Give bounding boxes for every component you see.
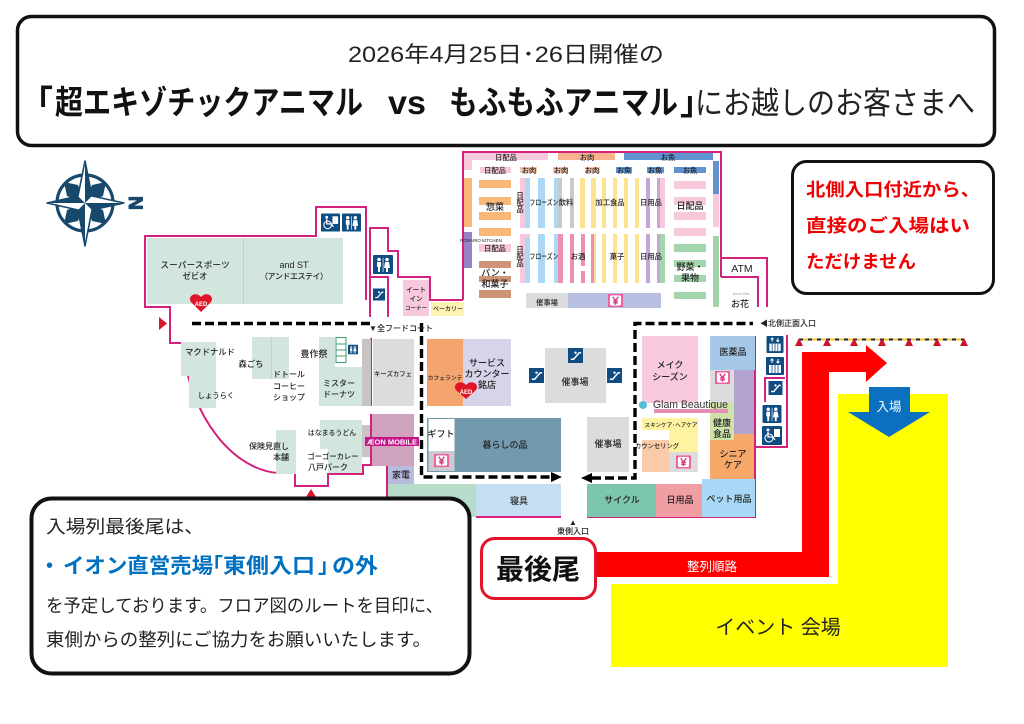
west wing tenants xyxy=(147,238,343,304)
east entrance label xyxy=(557,518,589,536)
eat-in corner xyxy=(403,280,429,316)
main title: 」 xyxy=(680,84,713,121)
central tenants: 催事場 xyxy=(561,376,589,387)
notice: north entrance: 北側入口付近から、 xyxy=(806,180,980,200)
west food court tenants: 家電 xyxy=(392,469,410,480)
callout: queue end: 東側からの整列にご協力をお願いいたします。 xyxy=(46,630,431,650)
north wing tenants: 食品 xyxy=(713,428,731,439)
north wing tenants xyxy=(587,336,755,517)
north wing tenants: サイクル xyxy=(604,495,640,505)
blue emphasis line xyxy=(39,555,378,578)
west food court tenants: キーズカフェ xyxy=(374,369,412,378)
west food court tenants: ミスター xyxy=(323,379,355,388)
Glam Beautique logo: Glam Beautique xyxy=(653,399,728,411)
supermarket: 日用品 xyxy=(640,252,662,261)
supermarket: 飲料 xyxy=(559,198,574,207)
west food court tenants: 豊作祭 xyxy=(300,348,328,359)
supermarket: 配 xyxy=(516,252,524,261)
central tenants: 銘店 xyxy=(478,379,496,390)
north wing tenants: スキンケア･ヘアケア xyxy=(644,422,698,429)
AED marker west xyxy=(190,294,212,312)
queue end label: 最後尾 xyxy=(496,554,580,585)
supermarket: お肉 xyxy=(585,166,599,175)
supermarket: ROSARIO KITCHEN xyxy=(460,238,502,243)
north wing tenants: シーズン xyxy=(652,371,688,382)
event venue yellow area xyxy=(611,394,948,667)
central tenants: カフェランテ xyxy=(428,375,463,382)
callout: queue end: を予定しております。フロア図のルートを目印に、 xyxy=(46,596,443,616)
red marker south xyxy=(306,489,316,497)
eat-in corner: コーナー xyxy=(405,305,427,312)
main title xyxy=(20,84,713,121)
supermarket: ATM xyxy=(731,263,753,275)
supermarket: 和菓子 xyxy=(481,278,509,289)
supermarket: お魚 xyxy=(648,166,663,175)
west wing tenants: ゼビオ xyxy=(183,271,207,281)
main title: 「 xyxy=(20,84,53,121)
east entrance label: 東側入口 xyxy=(557,526,589,536)
east entrance label: ▲ xyxy=(569,518,577,527)
blue emphasis line: 東側入口 xyxy=(223,555,315,578)
supermarket: お魚 xyxy=(661,153,676,162)
supermarket: 果物 xyxy=(681,272,699,283)
queue route red arrow: 整列順路 xyxy=(687,559,737,574)
west food court tenants: ショップ xyxy=(273,393,305,402)
eat-in corner: イート xyxy=(406,287,426,294)
supermarket: パン・ xyxy=(481,268,509,278)
blue emphasis line: イオン直営売場 xyxy=(63,555,213,578)
supermarket: 品 xyxy=(516,205,524,214)
title panel xyxy=(18,16,994,146)
supermarket: お魚 xyxy=(617,166,632,175)
central tenants xyxy=(427,339,629,472)
supermarket xyxy=(460,152,767,309)
supermarket: 日配品 xyxy=(676,201,704,211)
supermarket: フローズン xyxy=(530,198,558,207)
west wing tenants: and ST xyxy=(279,260,309,270)
floor map xyxy=(145,152,816,536)
callout: queue end: 入場列最後尾は、 xyxy=(46,517,204,537)
compass icon xyxy=(47,161,145,246)
north wing tenants: ケア xyxy=(724,460,742,470)
north wing tenants: メイク xyxy=(657,360,683,370)
west food court tenants: はなまるうどん xyxy=(308,428,356,437)
west food court tenants: しょうらく xyxy=(198,391,234,400)
supermarket: 催事場 xyxy=(536,298,559,307)
eat-in corner: イン xyxy=(409,296,423,303)
west wing tenants: スーパースポーツ xyxy=(160,260,230,270)
main title: vs xyxy=(388,84,426,121)
supermarket: 日配品 xyxy=(495,153,517,162)
supermarket: お花 xyxy=(731,298,749,309)
restroom icons west xyxy=(321,213,393,300)
north wing tenants: 日用品 xyxy=(666,495,694,505)
bakery: ベーカリー xyxy=(433,306,463,313)
supermarket: 野菜・ xyxy=(676,261,704,272)
central tenants: 催事場 xyxy=(594,438,622,449)
west food court tenants: ドーナツ xyxy=(323,390,355,399)
north entrance label: ◀北側正面入口 xyxy=(760,318,816,328)
notice: north entrance: ただけません xyxy=(806,252,916,272)
blue emphasis line: ・ xyxy=(39,555,60,578)
entrance marker west xyxy=(159,317,167,330)
entry blue arrow: 入場 xyxy=(876,400,902,414)
AEON Mobile sign: ÆON MOBILE xyxy=(367,438,417,446)
west food court tenants: 八戸パーク xyxy=(308,463,348,472)
supermarket: お魚 xyxy=(683,166,698,175)
supermarket: 日 xyxy=(516,245,524,254)
west food court tenants: マクドナルド xyxy=(185,347,235,357)
west food court tenants: 森ごち xyxy=(239,359,263,369)
supermarket: 日配品 xyxy=(484,244,506,253)
north service icons and walls xyxy=(755,335,787,447)
central tenants: サービス xyxy=(469,357,505,368)
walking route dashed xyxy=(192,323,753,483)
west food court tenants: ゴーゴーカレー xyxy=(307,452,359,461)
supermarket: お肉 xyxy=(580,153,594,162)
north wing tenants: 健康 xyxy=(713,417,731,428)
north wing tenants: カウンセリング xyxy=(635,441,680,450)
west food court tenants: 本舗 xyxy=(273,452,289,462)
supermarket: フローズン xyxy=(530,252,558,261)
west food court tenants: 寝具 xyxy=(510,495,528,506)
west wing tenants: （アンドエステイ） xyxy=(260,272,328,281)
event date heading: 2026年4月25日･26日開催の xyxy=(348,42,664,67)
callout: queue end xyxy=(32,498,470,674)
Glam Beautique logo xyxy=(639,399,728,413)
west food court tenants: コーヒー xyxy=(273,382,305,391)
supermarket: 惣菜 xyxy=(486,201,504,212)
notice: north entrance xyxy=(792,162,994,294)
west food court tenants: 保険見直し xyxy=(249,441,289,451)
supermarket: 加工食品 xyxy=(595,198,625,207)
north wing tenants: シニア xyxy=(719,449,747,459)
main title: もふもふアニマル xyxy=(449,84,678,121)
west food court tenants: ドトール xyxy=(273,370,305,379)
supermarket: お酒 xyxy=(571,252,585,261)
notice: north entrance: 直接のご入場はい xyxy=(806,215,970,236)
supermarket: 品 xyxy=(516,259,524,268)
blue emphasis line: の外 xyxy=(332,555,378,578)
blue emphasis line: 」 xyxy=(318,555,339,578)
north wing tenants: 医薬品 xyxy=(719,346,747,357)
entry blue arrow xyxy=(848,387,930,437)
supermarket: 日配品 xyxy=(484,166,506,175)
north wing tenants: ペット用品 xyxy=(706,494,752,504)
west food court tenants xyxy=(181,336,755,517)
supermarket: 日 xyxy=(516,191,524,200)
supermarket: Aeon Bar xyxy=(733,291,750,296)
supermarket: 配 xyxy=(516,198,524,207)
central tenants: カウンター xyxy=(464,368,510,379)
blue emphasis line: 「 xyxy=(202,555,223,578)
north mark: N xyxy=(124,196,145,210)
title suffix: にお越しのお客さまへ xyxy=(695,86,975,121)
bakery xyxy=(431,302,464,316)
supermarket: 菓子 xyxy=(610,252,624,261)
queue end label xyxy=(482,538,596,598)
central tenants: ギフト xyxy=(427,429,455,439)
supermarket: お肉 xyxy=(522,166,536,175)
main title: 超エキゾチックアニマル xyxy=(55,84,363,121)
food court label: ▼全フードコート xyxy=(369,323,433,333)
central tenants: 暮らしの品 xyxy=(482,439,528,450)
west walls xyxy=(145,207,463,497)
supermarket: お肉 xyxy=(554,166,568,175)
supermarket: 日用品 xyxy=(640,198,662,207)
AED marker west: AED xyxy=(195,302,208,308)
event venue yellow area: イベント 会場 xyxy=(715,616,841,639)
queue route red arrow xyxy=(595,345,887,577)
central tenants: AED xyxy=(460,390,473,396)
barrier cones xyxy=(795,338,968,346)
